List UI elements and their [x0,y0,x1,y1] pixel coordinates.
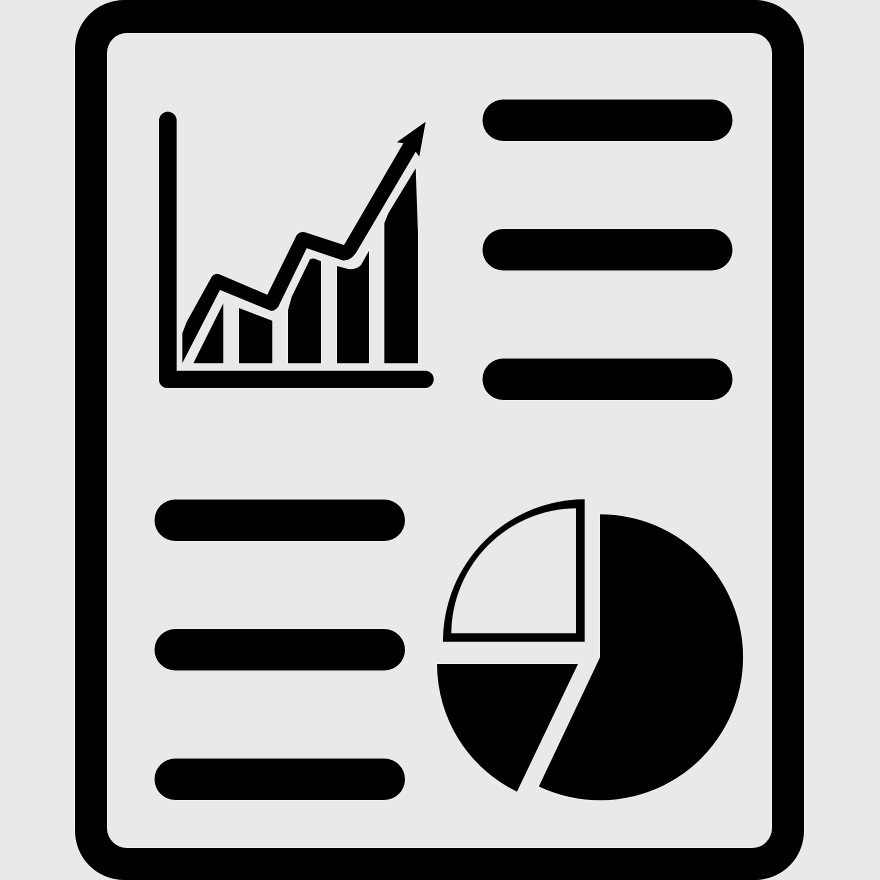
bar 1 [193,303,223,363]
text lines bottom left [154,500,405,800]
pie chart [437,499,743,800]
line 5 [154,629,405,670]
text lines top right [482,100,732,400]
lower left slice [437,664,578,792]
line 6 [154,758,405,800]
line 1 [482,100,732,141]
bar 2 [239,308,272,363]
bar 5 [384,168,418,363]
rising trend arrow [182,122,426,363]
line chart with bars [159,112,434,388]
line 2 [482,229,732,270]
bar 4 [337,251,369,363]
line 4 [154,500,405,541]
bar 3 [288,258,321,363]
chart axes [159,112,434,388]
outlined upper left slice [443,499,585,642]
large slice [539,514,743,800]
line 3 [482,358,732,400]
